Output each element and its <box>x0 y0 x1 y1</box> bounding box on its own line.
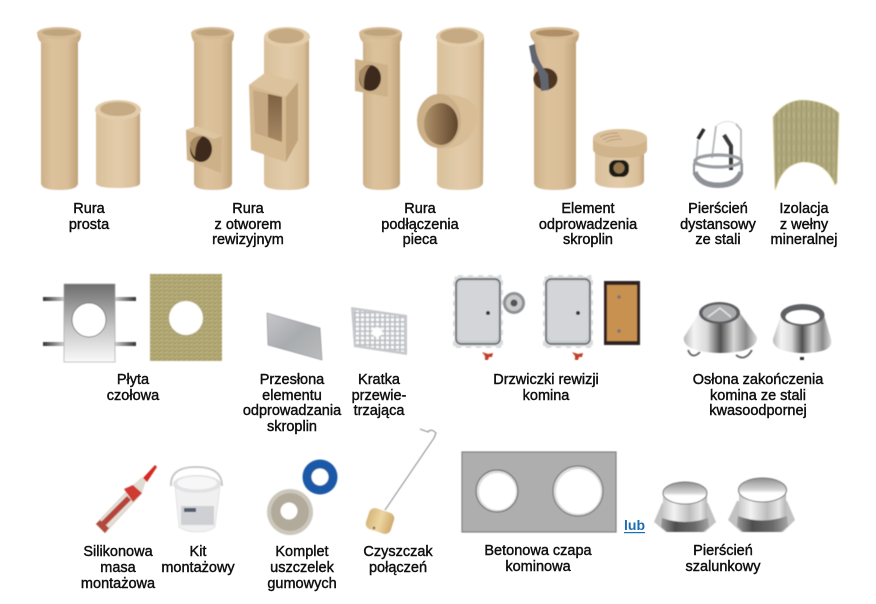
label: element odprowadzenia skroplin: odprowadzenia <box>539 217 638 233</box>
icon: inspection door 2 <box>543 275 593 348</box>
group: drzwiczki rewizji <box>453 275 640 404</box>
label: osłona zakończenia komina: komina ze stali <box>710 388 806 404</box>
label: rura z otworem: z otworem <box>215 217 281 233</box>
icon: door key 1 <box>482 352 493 360</box>
label: płyta czołowa: czołowa <box>107 388 160 404</box>
group: rura z otworem rewizyjnym <box>186 27 310 248</box>
label: osłona zakończenia komina: kwasoodpornej <box>709 403 807 419</box>
icon: door insulation board <box>604 281 640 345</box>
label: element odprowadzenia skroplin: Element <box>561 201 615 217</box>
icon: inspection pipe large <box>249 27 310 190</box>
icon: condensate drain cap <box>593 129 647 188</box>
icon: stove connection pipe small <box>355 27 402 190</box>
label: przesłona elementu: skroplin <box>267 419 317 435</box>
icon: straight pipe tall <box>37 27 81 190</box>
icon: mineral wool plate <box>150 274 222 361</box>
icon: putty bucket <box>171 467 222 532</box>
label: osłona zakończenia komina: Osłona zakończenia <box>693 372 824 388</box>
group: kratka <box>351 307 407 419</box>
label: kit montażowy: Kit <box>190 544 206 560</box>
label: drzwiczki rewizji komina: komina <box>523 388 570 404</box>
icon: steel spacer ring <box>694 121 742 187</box>
icon: round lock <box>503 292 525 314</box>
label: czyszczak połączeń: Czyszczak <box>363 544 433 560</box>
icon: front steel plate <box>43 284 136 362</box>
icon: concrete cap <box>462 452 616 532</box>
label: rura z otworem: rewizyjnym <box>212 232 284 248</box>
icon: ventilation grille <box>351 307 407 355</box>
label: kratka przewietrzająca: przewie- <box>352 388 407 404</box>
group: rura prosta <box>37 27 141 233</box>
label: pierścień dystansowy: dystansowy <box>680 217 757 233</box>
label: kratka przewietrzająca: Kratka <box>358 372 401 388</box>
label: czyszczak połączeń: połączeń <box>369 560 427 576</box>
label: rura podłączenia pieca: pieca <box>403 232 438 248</box>
group: czyszczak połączeń <box>363 429 436 576</box>
icon: door key 2 <box>572 352 583 360</box>
group: osłona zakończenia <box>684 302 831 419</box>
group: pierścień szalunkowy <box>654 478 795 575</box>
label: element odprowadzenia skroplin: skroplin <box>563 232 613 248</box>
icon: steel cone with feet <box>684 302 757 358</box>
group: płyta czołowa <box>43 274 222 404</box>
label: izolacja z wełny mineralnej: z wełny <box>780 217 829 233</box>
icon: mineral wool half shell <box>773 100 839 190</box>
label: rura prosta: Rura <box>73 201 106 217</box>
label: rura podłączenia pieca: Rura <box>404 201 437 217</box>
label: rura podłączenia pieca: podłączenia <box>381 217 460 233</box>
label: betonowa czapa kominowa: Betonowa czapa <box>484 543 593 559</box>
label: silikonowa masa montażowa: masa <box>100 560 137 576</box>
label: kit montażowy: montażowy <box>161 560 235 576</box>
group: kit montażowy <box>161 467 235 576</box>
label: kratka przewietrzająca: trzająca <box>354 403 405 419</box>
icon: grey rubber seal <box>267 489 313 535</box>
group: przesłona <box>243 313 342 435</box>
label: komplet uszczelek gumowych: uszczelek <box>270 560 335 576</box>
group: element odprowadzenia skroplin <box>529 27 647 248</box>
label: pierścień dystansowy: Pierścień <box>688 201 748 217</box>
icon: formwork ring 1 <box>654 482 716 532</box>
icon: straight pipe short <box>95 100 141 188</box>
label: przesłona elementu: odprowadzania <box>243 403 342 419</box>
group: izolacja z wełny <box>771 100 839 248</box>
label: płyta czołowa: Płyta <box>117 372 150 388</box>
icon: steel cone <box>773 304 831 360</box>
label: izolacja z wełny mineralnej: Izolacja <box>779 201 830 217</box>
icon: inspection door 1 <box>453 275 503 348</box>
icon: condensate drain pipe <box>529 27 579 190</box>
label: betonowa czapa kominowa: kominowa <box>505 559 572 575</box>
icon: stove connection pipe large <box>417 27 484 190</box>
label: pierścień dystansowy: ze stali <box>695 232 741 248</box>
label: przesłona elementu: elementu <box>262 388 322 404</box>
label: drzwiczki rewizji komina: Drzwiczki rewizji <box>493 372 599 388</box>
icon: silicone cartridge <box>96 465 157 533</box>
icon: blue rubber seal <box>302 460 338 494</box>
label: rura prosta: prosta <box>69 217 110 233</box>
label: izolacja z wełny mineralnej: mineralnej <box>771 232 837 248</box>
label: pierścień szalunkowy: Pierścień <box>693 543 753 559</box>
label: komplet uszczelek gumowych: Komplet <box>275 544 329 560</box>
icon: joint cleaner <box>364 429 436 535</box>
group: betonowa czapa <box>462 452 616 575</box>
group: komplet uszczelek <box>267 460 338 592</box>
group: silikonowa masa <box>81 465 157 592</box>
label: silikonowa masa montażowa: montażowa <box>81 576 156 592</box>
label: silikonowa masa montażowa: Silikonowa <box>83 544 154 560</box>
icon: inspection pipe small <box>186 27 234 190</box>
label: przesłona elementu: Przesłona <box>260 372 325 388</box>
icon: condensate shutter plate <box>267 313 322 360</box>
label: komplet uszczelek gumowych: gumowych <box>267 576 337 592</box>
icon: formwork ring 2 <box>728 478 795 532</box>
group: pierścień dystansowy <box>680 121 757 248</box>
label: rura z otworem: Rura <box>232 201 265 217</box>
group: rura podłączenia pieca <box>355 27 484 248</box>
lub link: lub <box>624 517 645 533</box>
label: pierścień szalunkowy: szalunkowy <box>686 559 761 575</box>
